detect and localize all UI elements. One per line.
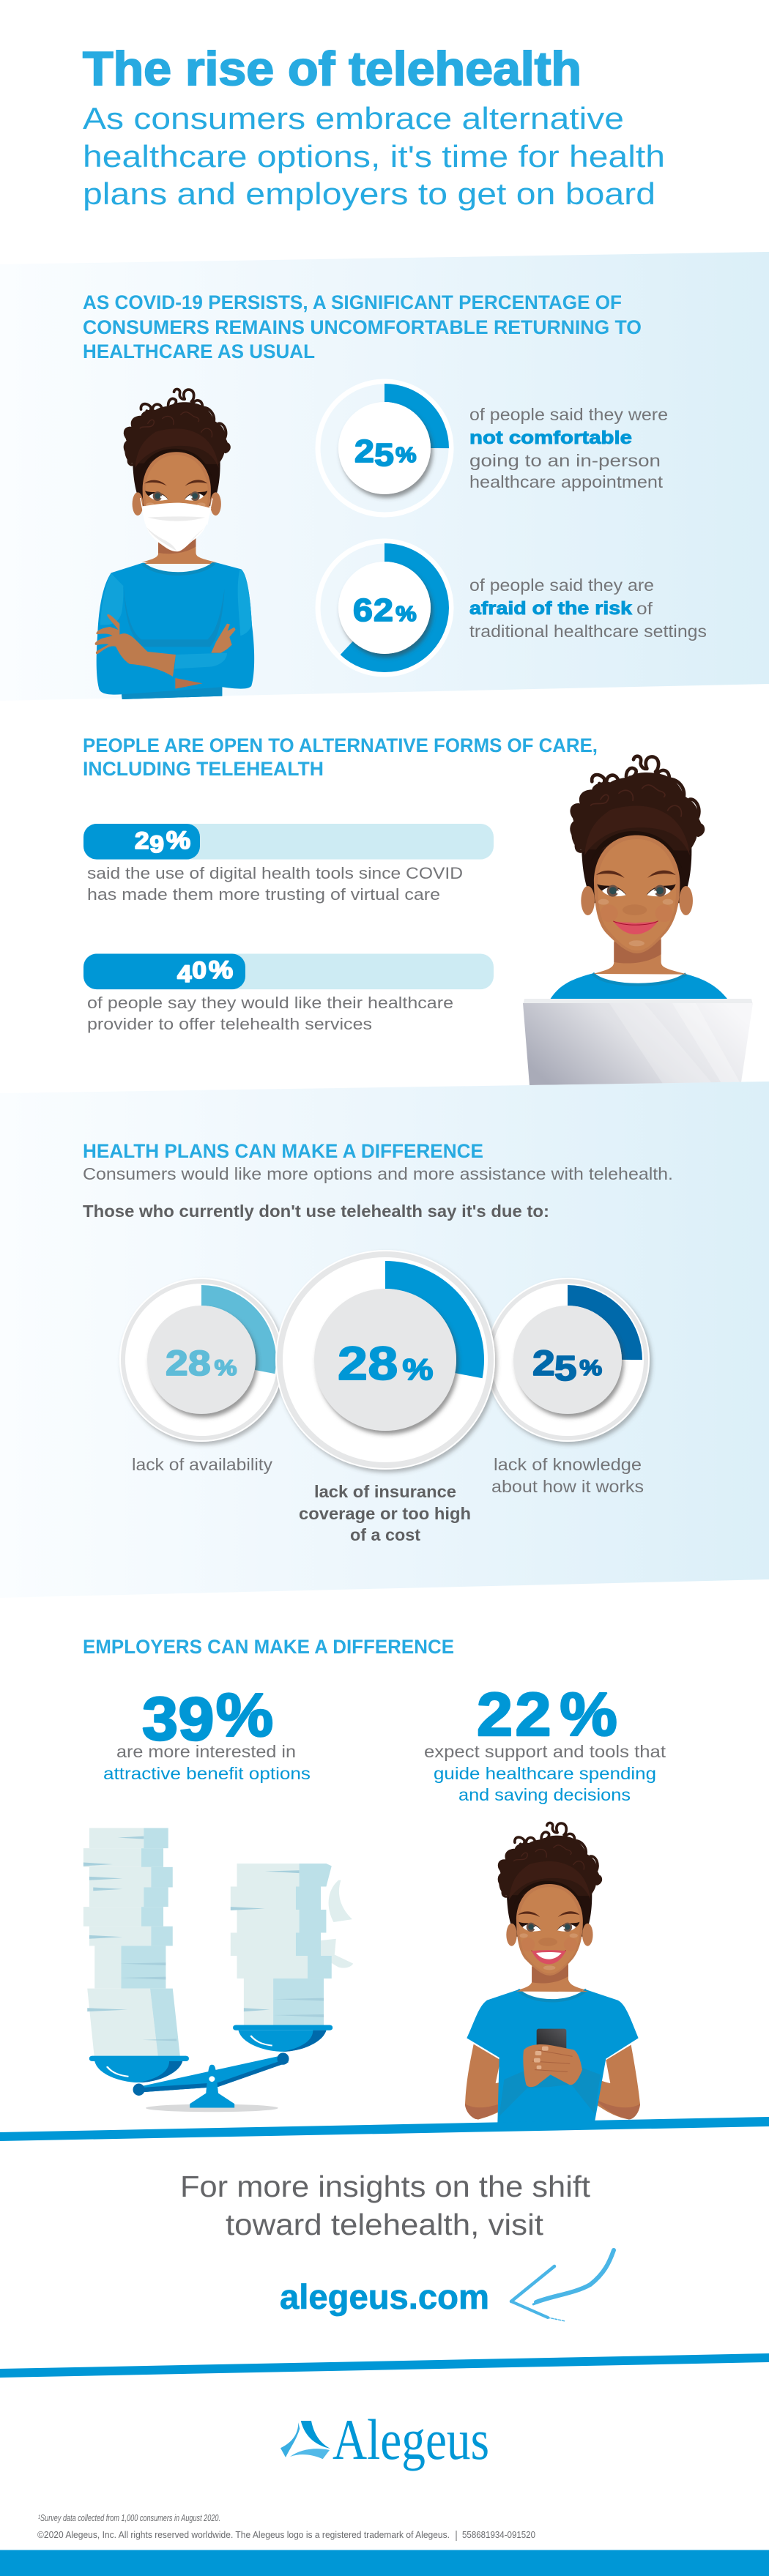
lead-in text: Those who currently don't use telehealth say it's due to: bbox=[83, 1202, 549, 1221]
divider band: lower bbox=[0, 2353, 769, 2378]
intro text: Consumers would like more options and more assistance with telehealth. bbox=[83, 1164, 673, 1183]
donut chart: 62 percent: 62 bbox=[353, 592, 393, 628]
donut chart: 25 percent bbox=[318, 381, 451, 515]
heading: alternative forms of care: INCLUDING TELEHEALTH bbox=[83, 758, 324, 780]
big stat: 39 percent bbox=[103, 1681, 311, 1783]
stat text: afraid of the risk: of people said they are bbox=[469, 576, 654, 595]
stat text: more trusting: has made them more trusting of virtual care bbox=[87, 885, 440, 904]
stat text: not comfortable bbox=[469, 405, 668, 491]
logo: Alegeus bbox=[281, 2408, 489, 2471]
radial chart: lack of availability 28 percent: % bbox=[215, 1355, 237, 1380]
progress bar: 40 percent: 40 bbox=[177, 958, 207, 988]
radial chart: lack of insurance coverage 28 percent: % bbox=[403, 1353, 433, 1386]
donut chart: 62 percent bbox=[318, 541, 451, 674]
subtitle: plans and employers to get on board bbox=[83, 176, 655, 211]
radial chart: lack of insurance coverage 28 percent bbox=[275, 1250, 495, 1470]
big stat: 22 percent: and saving decisions bbox=[458, 1785, 631, 1804]
call to action text: toward telehealth, visit bbox=[226, 2208, 544, 2241]
stat text: not comfortable: healthcare appointment bbox=[469, 472, 664, 491]
radial chart: lack of knowledge 25 percent: % bbox=[579, 1355, 602, 1380]
illustration: woman at a laptop bbox=[523, 756, 753, 1085]
footer band bbox=[0, 2550, 769, 2576]
stat text: afraid of the risk: afraid of the risk bbox=[469, 598, 632, 619]
big stat: 22 percent bbox=[424, 1680, 666, 1804]
website link: alegeus.com bbox=[280, 2277, 489, 2316]
progress bar: 40 percent: % bbox=[209, 956, 233, 984]
radial chart: lack of knowledge 25 percent: 25 bbox=[532, 1343, 577, 1388]
footer text: 558681934-091520 bbox=[462, 2529, 535, 2540]
stat text: more trusting bbox=[87, 864, 463, 904]
panel: covid discomfort bbox=[0, 252, 769, 701]
heading: alternative forms of care: PEOPLE ARE OPEN TO ALTERNATIVE FORMS OF CARE, bbox=[83, 734, 598, 756]
heading: health plans can make a difference: HEALTH PLANS CAN MAKE A DIFFERENCE bbox=[83, 1140, 483, 1162]
big stat: 22 percent: % bbox=[560, 1680, 617, 1749]
stat text: offer telehealth: provider to offer telehealth services bbox=[87, 1015, 372, 1033]
stat text: afraid of the risk: of bbox=[636, 599, 653, 618]
logo: Alegeus: Alegeus bbox=[333, 2408, 489, 2471]
call to action text: For more insights on the shift bbox=[180, 2170, 591, 2203]
big stat: 22 percent: guide healthcare spending bbox=[434, 1764, 656, 1783]
illustration: paper stacks on a balance scale bbox=[83, 1828, 353, 2112]
label: lack of insurance coverage: of a cost bbox=[350, 1525, 420, 1544]
footer text bbox=[37, 2513, 535, 2541]
footer text: ¹Survey data collected from 1,000 consumers in August 2020. bbox=[38, 2513, 220, 2523]
progress bar: 29 percent: % bbox=[166, 827, 190, 855]
big stat: 39 percent: attractive benefit options bbox=[103, 1764, 311, 1783]
donut chart: 25 percent: 25 bbox=[354, 433, 394, 473]
panel: employers bbox=[83, 1636, 666, 2123]
big stat: 22 percent: 22 bbox=[477, 1680, 551, 1749]
subtitle bbox=[83, 101, 665, 211]
stat text: offer telehealth: of people say they would like their healthcare bbox=[87, 994, 453, 1012]
radial chart: lack of availability 28 percent bbox=[119, 1278, 283, 1442]
footer text: ©2020 Alegeus, Inc. All rights reserved worldwide. The Alegeus logo is a registered trademark of Alegeus. bbox=[37, 2529, 450, 2540]
label: lack of insurance coverage: lack of insurance bbox=[314, 1482, 456, 1501]
radial chart: lack of knowledge 25 percent bbox=[486, 1278, 650, 1442]
subtitle: healthcare options, it's time for health bbox=[83, 139, 665, 174]
illustration: woman wearing a mask with crossed arms bbox=[95, 389, 254, 699]
stat text: not comfortable: of people said they were bbox=[469, 405, 668, 424]
big stat: 39 percent: % bbox=[216, 1681, 273, 1750]
big stat: 39 percent: 39 bbox=[142, 1685, 214, 1754]
donut chart: 62 percent: % bbox=[395, 602, 417, 626]
heading: covid persists: AS COVID-19 PERSISTS, A SIGNIFICANT PERCENTAGE OF bbox=[83, 291, 622, 313]
label: lack of insurance coverage bbox=[299, 1482, 471, 1544]
panel: call to action bbox=[180, 2170, 614, 2321]
stat text: afraid of the risk: traditional healthcare settings bbox=[469, 622, 707, 641]
heading: employers can make a difference: EMPLOYERS CAN MAKE A DIFFERENCE bbox=[83, 1636, 454, 1658]
illustration: woman holding a smartphone bbox=[465, 1823, 640, 2123]
donut chart: 25 percent: % bbox=[395, 443, 416, 467]
panel: open to alternative care bbox=[83, 734, 753, 1085]
stat text: more trusting: said the use of digital health tools since COVID bbox=[87, 864, 463, 882]
radial chart: lack of availability 28 percent: 28 bbox=[166, 1343, 211, 1382]
heading: covid persists bbox=[83, 291, 642, 362]
stat text: offer telehealth bbox=[87, 994, 453, 1033]
header bbox=[83, 42, 665, 211]
stat text: not comfortable: not comfortable bbox=[469, 428, 632, 448]
heading: covid persists: HEALTHCARE AS USUAL bbox=[83, 340, 315, 362]
call to action text bbox=[180, 2170, 591, 2241]
label: lack of knowledge bbox=[491, 1455, 644, 1496]
radial chart: lack of insurance coverage 28 percent: 28 bbox=[338, 1337, 398, 1390]
label: lack of insurance coverage: coverage or too high bbox=[299, 1504, 471, 1523]
heading: covid persists: CONSUMERS REMAINS UNCOMFORTABLE RETURNING TO bbox=[83, 316, 642, 338]
panel: health plans bbox=[0, 1082, 769, 1598]
label: lack of knowledge: lack of knowledge bbox=[494, 1455, 642, 1474]
big stat: 39 percent: are more interested in bbox=[116, 1742, 296, 1761]
heading: alternative forms of care bbox=[83, 734, 598, 780]
arrow: pointing to website bbox=[511, 2250, 614, 2321]
label: lack of knowledge: about how it works bbox=[491, 1477, 644, 1496]
big stat: 22 percent: expect support and tools that bbox=[424, 1742, 666, 1761]
stat text: afraid of the risk bbox=[469, 576, 707, 641]
subtitle: As consumers embrace alternative bbox=[83, 101, 624, 135]
progress bar: 40 percent bbox=[83, 953, 494, 989]
label: lack of availability: lack of availability bbox=[132, 1455, 273, 1474]
stat text: not comfortable: going to an in-person bbox=[469, 451, 661, 470]
title: The rise of telehealth bbox=[83, 42, 582, 95]
progress bar: 29 percent: 29 bbox=[135, 828, 164, 858]
divider band: upper bbox=[0, 2117, 769, 2141]
progress bar: 29 percent bbox=[83, 824, 494, 860]
